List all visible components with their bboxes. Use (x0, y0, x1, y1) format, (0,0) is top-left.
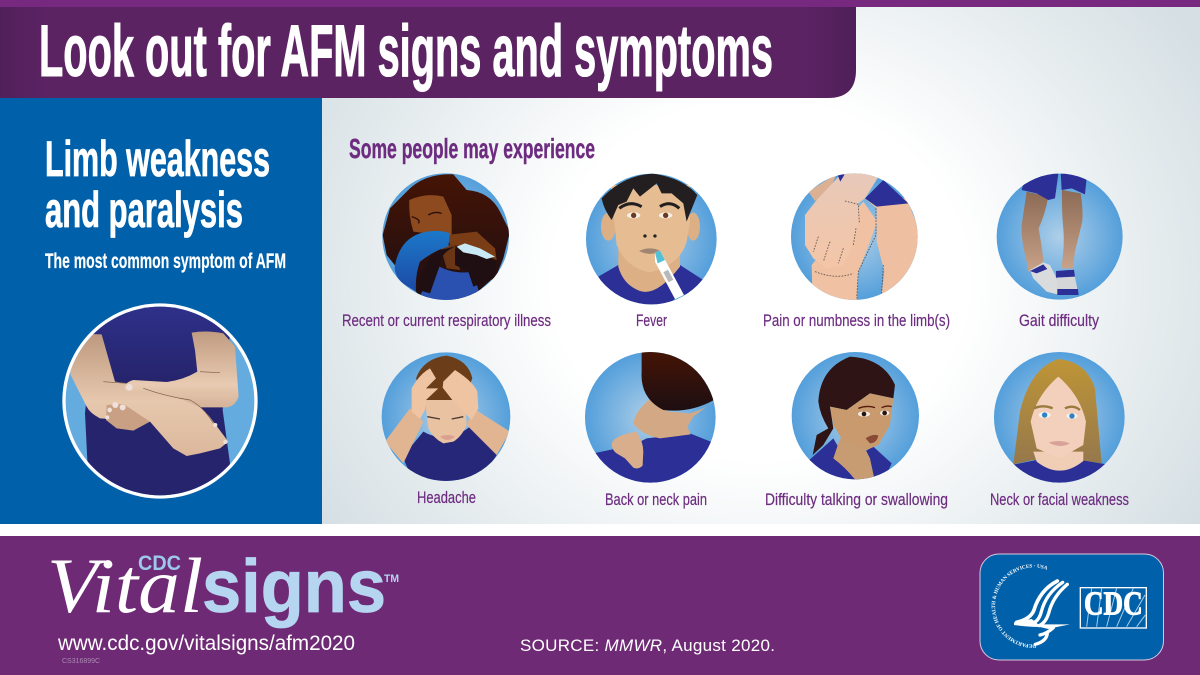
footer band (0, 536, 1200, 675)
icon: HHS eagle (1014, 581, 1070, 644)
title banner (0, 7, 856, 98)
publication code: CS316899C (62, 658, 100, 665)
label: Fever (636, 311, 667, 330)
icon: boy holding head (382, 352, 510, 482)
label: Gait difficulty (1019, 311, 1099, 330)
label: Neck or facial weakness (990, 490, 1129, 509)
icon: person coughing into sleeve (382, 173, 510, 302)
icon: girl with facial droop (994, 352, 1125, 485)
panel: limb weakness and paralysis (0, 98, 322, 524)
HHS seal text: DEPARTMENT OF HEALTH & HUMAN SERVICES · USA (992, 564, 1047, 648)
label: Headache (417, 488, 476, 507)
icon: legs and shoes (997, 172, 1123, 300)
url: www.cdc.gov/vitalsigns/afm2020 (57, 632, 355, 655)
source: SOURCE: MMWR, August 2020. (520, 636, 775, 655)
label: Back or neck pain (605, 490, 707, 509)
label: Difficulty talking or swallowing (765, 490, 948, 509)
logo: CDC Vital Signs: Vital (47, 542, 203, 629)
logo: CDC Vital Signs: signs (202, 544, 386, 628)
panel: symptoms background (322, 7, 1200, 524)
symptom: gait difficulty (997, 172, 1123, 330)
label: Recent or current respiratory illness (342, 311, 551, 330)
heading: limb weakness: Limb weakness (45, 131, 270, 187)
heading: and paralysis: and paralysis (45, 182, 243, 238)
symptom: difficulty talking or swallowing (765, 352, 948, 509)
label: Pain or numbness in the limb(s) (763, 311, 950, 330)
icon: hands on neck (585, 352, 716, 485)
symptom: neck or facial weakness (990, 352, 1129, 509)
subheading: The most common symptom of AFM (45, 250, 286, 273)
heading: some people may experience: Some people may experience (349, 133, 595, 164)
top stripe (0, 0, 1200, 7)
icon: boy with thermometer (586, 174, 717, 307)
icon: girl holding throat (792, 352, 919, 482)
symptom: fever (586, 174, 717, 330)
symptom: pain or numbness (763, 172, 950, 330)
icon: CDC box: CDC (1084, 584, 1143, 622)
logo: CDC Vital Signs: CDC (138, 552, 181, 575)
logo: HHS and CDC (980, 554, 1164, 660)
icon: arms crossed, limb weakness (62, 300, 258, 503)
icon: hand on leg (791, 172, 920, 303)
symptom: back or neck pain (585, 352, 716, 509)
symptom: respiratory illness (342, 173, 551, 330)
logo: CDC Vital Signs (47, 542, 399, 629)
logo: CDC Vital Signs: TM (384, 573, 399, 585)
symptom: headache (382, 352, 510, 507)
